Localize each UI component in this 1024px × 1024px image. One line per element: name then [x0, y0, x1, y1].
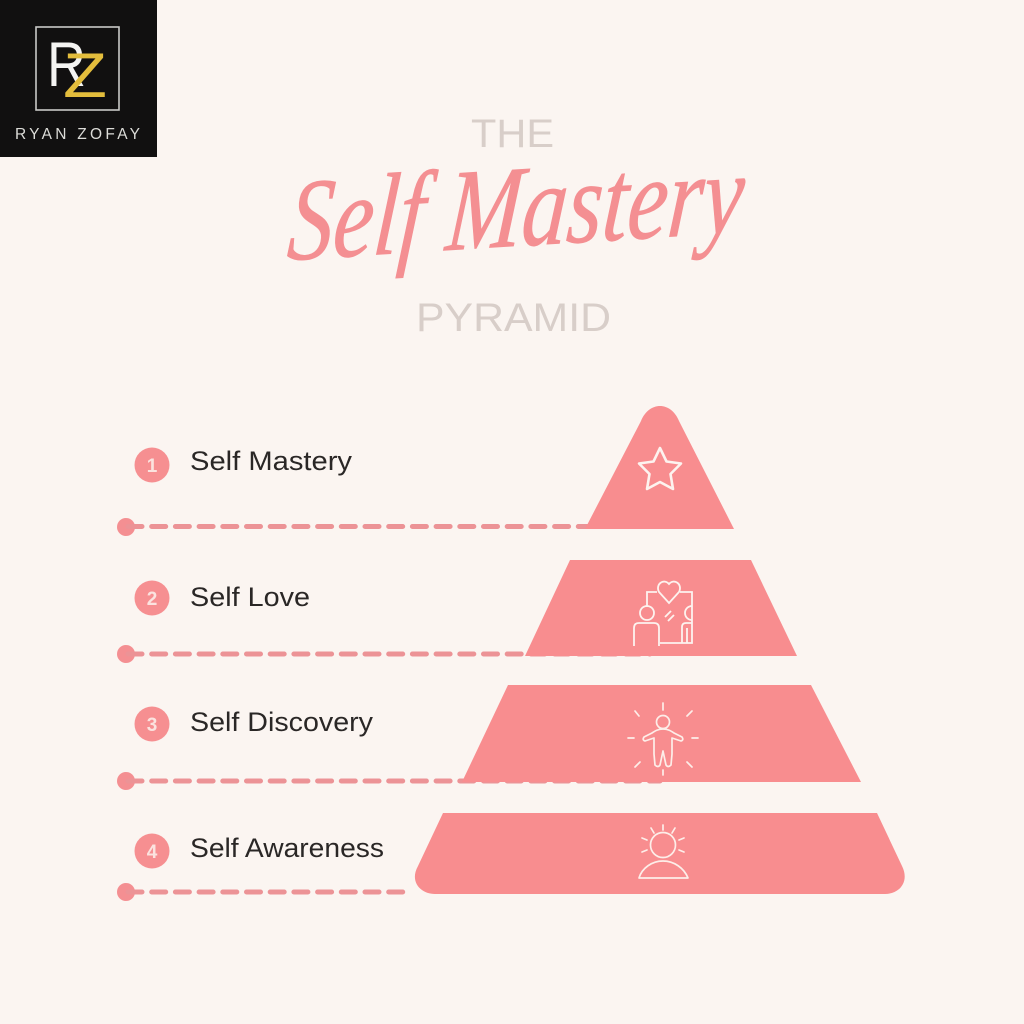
icon: radiant person	[628, 703, 698, 775]
label 4: Self Awareness: 4	[147, 842, 158, 863]
label 4: Self Awareness: Self Awareness	[190, 833, 384, 863]
logo: Ryan Zofay: RYAN ZOFAY	[15, 126, 140, 143]
label 1: Self Mastery: Self Mastery	[190, 446, 353, 476]
icon: person and mirror with heart	[634, 582, 692, 646]
label 3: Self Discovery: Self Discovery	[190, 707, 374, 737]
tier 3: Self Discovery pyramid segment	[462, 685, 861, 782]
label 1: Self Mastery	[134, 446, 353, 482]
label 3: Self Discovery	[134, 706, 374, 742]
title: Self Mastery script: Self Mastery	[284, 129, 749, 286]
logo: Ryan Zofay: Z	[63, 41, 107, 111]
title: PYRAMID: PYRAMID	[416, 296, 611, 340]
connector line 3	[117, 772, 660, 790]
tier 1: Self Mastery pyramid segment	[585, 406, 734, 529]
logo: Ryan Zofay: R	[47, 30, 86, 100]
label 2: Self Love: 2	[147, 589, 157, 610]
tier 2: Self Love pyramid segment	[525, 560, 797, 656]
connector line 4	[117, 883, 409, 901]
label 2: Self Love	[134, 580, 310, 616]
label 2: Self Love: Self Love	[190, 582, 310, 612]
label 1: Self Mastery: 1	[147, 456, 158, 477]
tier 4: Self Awareness pyramid segment	[415, 813, 905, 894]
connector line 1	[117, 518, 587, 536]
label 3: Self Discovery: 3	[147, 715, 157, 736]
label 4: Self Awareness	[134, 833, 384, 868]
logo: Ryan Zofay	[0, 0, 157, 157]
title: THE: THE	[471, 112, 554, 156]
connector line 2	[117, 645, 650, 663]
icon: person with sun	[639, 825, 688, 878]
icon: star	[639, 448, 681, 489]
